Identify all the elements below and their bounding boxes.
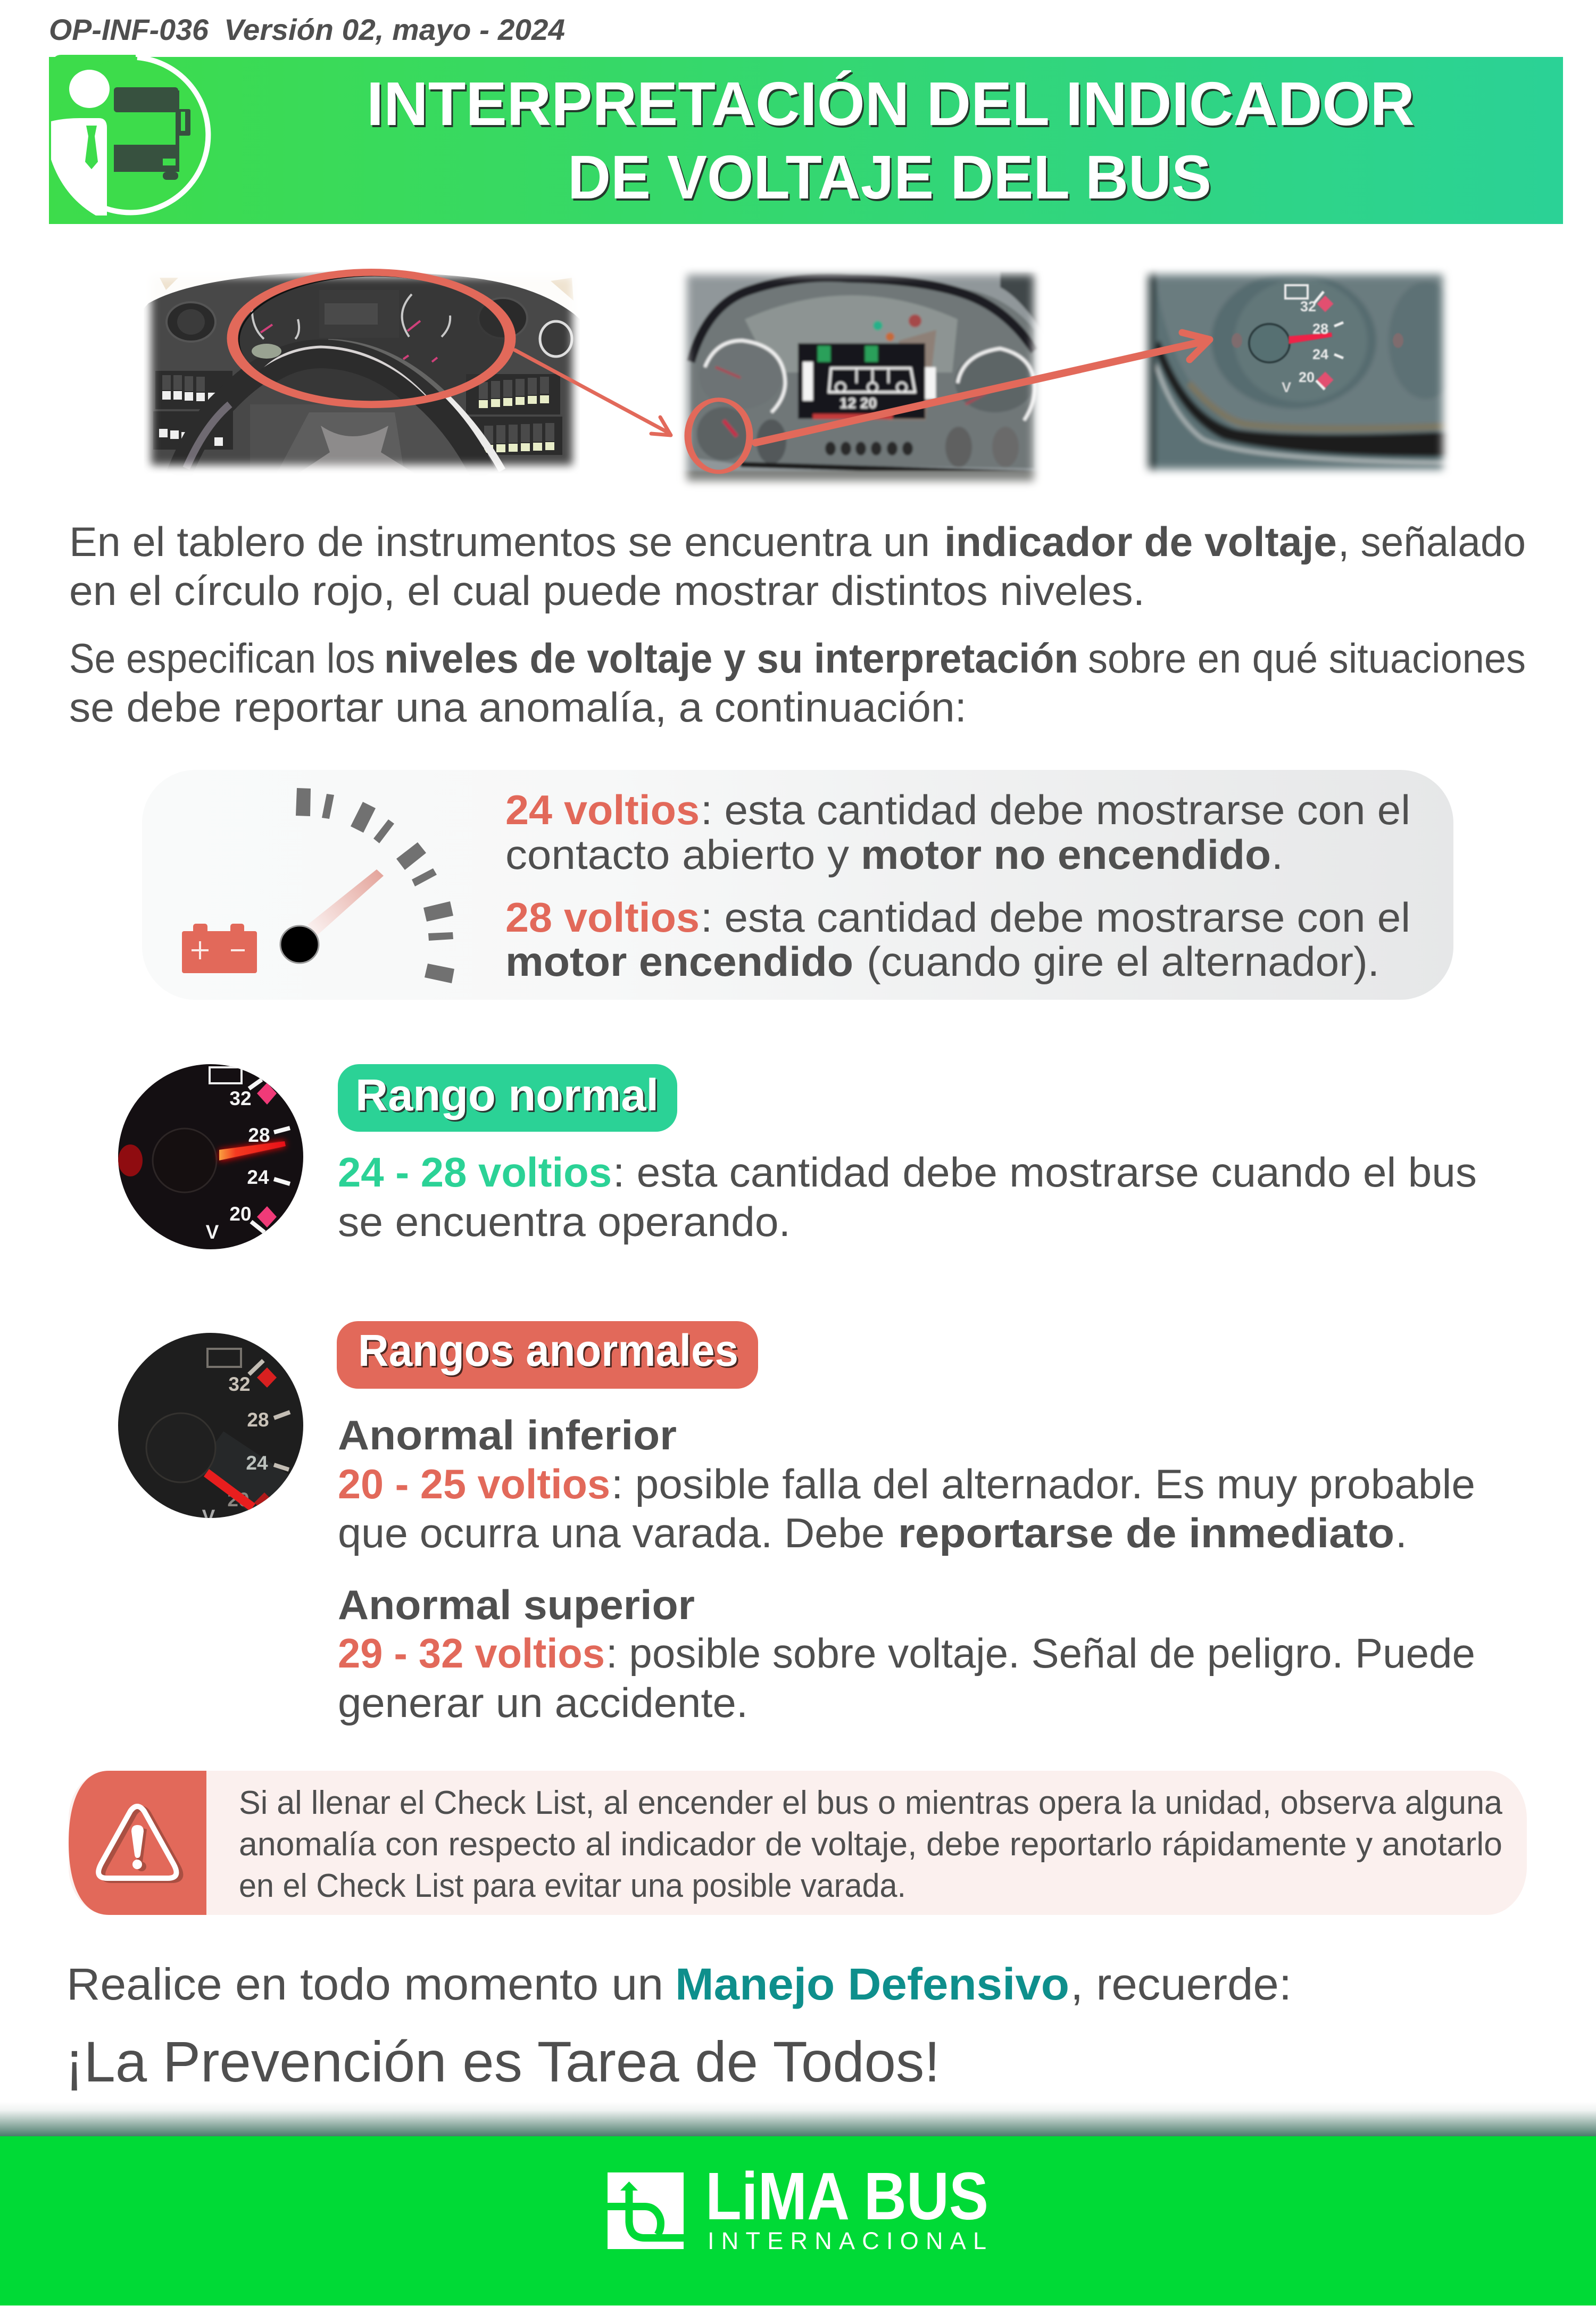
photo: instrument cluster [676,266,1048,492]
second paragraph: sobre en qué situaciones [1088,635,1526,682]
text: 24 volts: 24 voltios [505,786,700,833]
text: 24 volts: motor no encendido [861,831,1271,878]
text: normal range description: 24 - 28 voltios [338,1149,612,1196]
text: lower abnormal: : posible falla del alternador. Es muy probable [611,1461,1475,1507]
text: 28 volts: 28 voltios [505,894,700,941]
arrow: cluster to voltage gauge [755,333,1210,443]
panel: normal range [338,1064,1477,1245]
photo: gauge in abnormal range: 32 [228,1373,251,1395]
badge: rangos anormales: Rangos anormales [360,1327,740,1377]
footer [0,2102,1596,2305]
photo: voltage gauge close-up [1138,266,1463,484]
icon: driver and bus [51,55,211,215]
text: 28 volts: : esta cantidad debe mostrarse con el [701,894,1410,941]
callout: check list warning [69,1771,1527,1915]
arrow: dashboard to cluster [515,350,671,435]
switch panels [153,371,562,455]
logo: wordmark: INTERNACIONAL [708,2227,986,2254]
intro paragraph: , señalado [1338,518,1526,565]
document code: Versión 02, mayo - 2024 [224,13,565,46]
text: lower abnormal: . [1395,1509,1407,1556]
second paragraph: se debe reportar una anomalía, a continuación: [69,684,967,731]
closing reminder: Realice en todo momento un [66,1959,663,2009]
text: warning message: anomalía con respecto al indicador de voltaje, debe reportarlo rápidamente y anotarlo [239,1826,1502,1863]
icon: warning triangle [98,1806,180,1880]
document code: OP-INF-036 [49,13,209,46]
photo: voltage gauge close-up: 24 [1312,346,1328,362]
steering column [250,404,468,474]
steering wheel [178,343,502,476]
closing reminder [66,1959,1292,2009]
intro paragraph: en el círculo rojo, el cual puede mostrar distintos niveles. [69,567,1145,614]
intro paragraph: indicador de voltaje [944,518,1337,565]
title: DE VOLTAJE DEL BUS [569,145,1213,214]
closing reminder: , recuerde: [1070,1959,1292,2009]
text: 24 volts [505,786,1410,878]
photo: gauge in abnormal range: 24 [246,1452,268,1474]
text: upper abnormal: : posible sobre voltaje. Señal de peligro. Puede [606,1630,1475,1677]
text: 24 volts: contacto abierto y [505,831,849,878]
text: upper abnormal: generar un accidente. [338,1679,748,1726]
photo: voltage gauge close-up: 20 [1299,369,1315,385]
text: 28 volts [505,894,1410,985]
icon: gauge needle [280,869,384,963]
icon: battery [182,924,257,973]
logo: wordmark: LiMA BUS [705,2159,988,2234]
vents [167,302,215,342]
photo: gauge in normal range: V [206,1221,219,1243]
header banner [49,55,1563,224]
intro paragraph: En el tablero de instrumentos se encuentra un [69,518,930,565]
text: upper abnormal: Anormal superior [338,1581,695,1628]
second paragraph: niveles de voltaje y su interpretación [384,635,1078,682]
text: lower abnormal: 20 - 25 voltios [338,1461,610,1507]
second paragraph: Se especifican los [69,635,375,682]
text: 24 volts: . [1271,831,1283,878]
photo: gauge in abnormal range [118,1333,303,1528]
photo: instrument cluster: 12 20 [839,395,877,411]
photo: gauge in normal range: 20 [229,1203,252,1225]
right gauge [955,351,1035,412]
text: lower abnormal [338,1412,1475,1556]
left gauge [759,347,782,374]
display screen [798,343,925,419]
photo: gauge in abnormal range: 28 [247,1409,269,1431]
panel: gauge and reference voltages [142,770,1453,1000]
intro paragraph [69,518,1526,614]
text: 28 volts: motor encendido [505,938,853,985]
document code [49,13,565,46]
title [367,69,1416,214]
text: lower abnormal: Anormal inferior [338,1412,677,1458]
closing reminder: Manejo Defensivo [675,1959,1069,2009]
text: upper abnormal: 29 - 32 voltios [338,1630,605,1677]
push buttons [825,442,913,455]
gauges in cluster [232,272,510,404]
text: lower abnormal: reportarse de inmediato [898,1509,1394,1556]
photo: gauge in normal range: 28 [248,1124,270,1146]
text: 24 volts: : esta cantidad debe mostrarse con el [701,786,1410,833]
photo: voltage gauge close-up: V [1282,379,1291,395]
badge: rango normal: Rango normal [357,1072,660,1122]
photo: gauge in abnormal range: 20 [227,1489,250,1511]
photo: gauge in normal range: 32 [229,1088,252,1109]
photo: voltage gauge close-up: 28 [1312,321,1328,337]
text: 28 volts: (cuando gire el alternador). [867,938,1379,985]
text: normal range description: se encuentra operando. [338,1198,791,1245]
text: warning message: en el Check List para evitar una posible varada. [239,1868,906,1904]
photo: gauge in normal range [118,1064,303,1249]
text: normal range description: : esta cantidad debe mostrarse cuando el bus [613,1149,1477,1196]
badge: rango normal [338,1064,677,1132]
text: upper abnormal [338,1581,1475,1726]
logo: Lima Bus mark [608,2172,684,2249]
photo: bus dashboard with steering wheel [144,266,580,476]
title: DE VOLTAJE DEL BUS [568,143,1211,212]
photo: gauge in normal range: 24 [247,1166,269,1188]
panel: abnormal ranges [337,1321,1475,1726]
closing slogan: ¡La Prevención es Tarea de Todos! [65,2029,940,2094]
icon: gauge ticks [296,788,454,983]
red circle on voltage gauge [688,400,750,472]
title: INTERPRETACIÓN DEL INDICADOR [368,71,1416,140]
badge: rangos anormales: Rangos anormales [358,1325,738,1375]
red circle on cluster [232,272,510,405]
photo: gauge in abnormal range: V [202,1506,215,1528]
badge: rango normal: Rango normal [355,1070,659,1120]
text: normal range description [338,1149,1477,1245]
text: warning message [239,1785,1502,1904]
photo: voltage gauge close-up: 32 [1300,298,1316,314]
second paragraph [69,635,1526,731]
text: warning message: Si al llenar el Check List, al encender el bus o mientras opera la unidad, observa alguna [239,1785,1502,1821]
text: lower abnormal: que ocurra una varada. Debe [338,1509,885,1556]
title: INTERPRETACIÓN DEL INDICADOR [367,69,1415,138]
